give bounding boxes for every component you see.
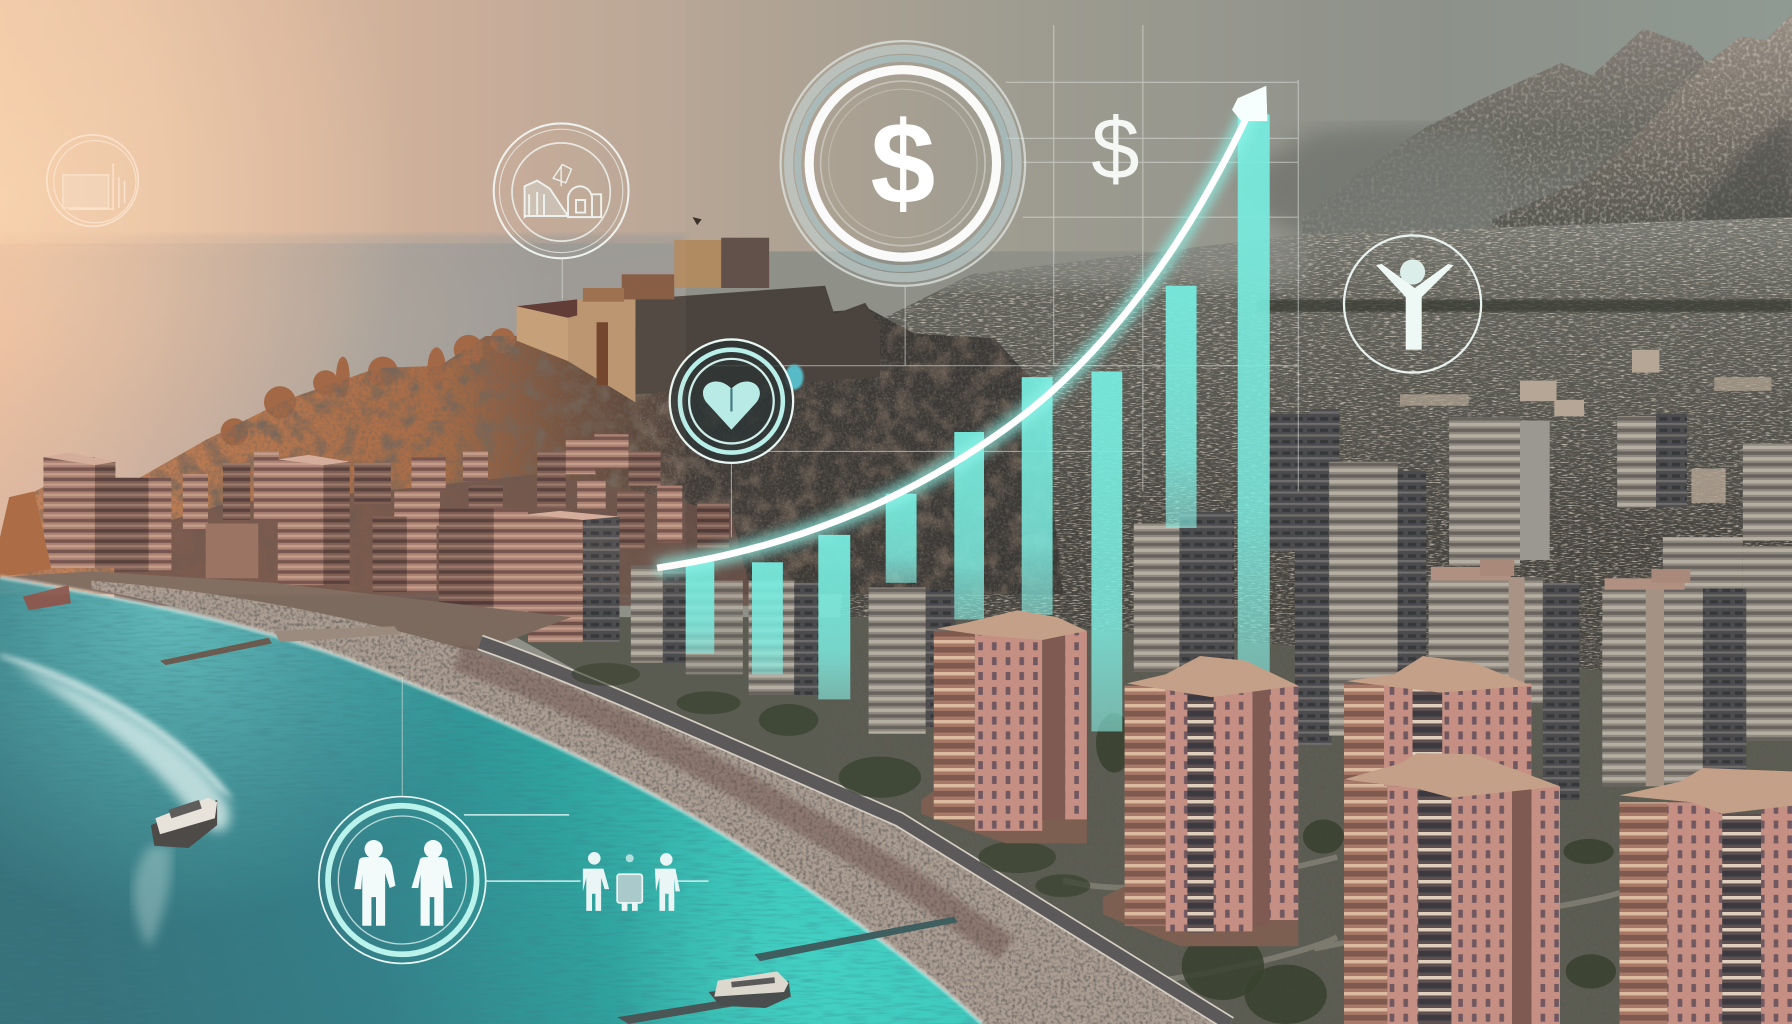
tower bbox=[1617, 414, 1687, 507]
icon: person with raised arms badge bbox=[1344, 235, 1481, 373]
lower land bbox=[480, 617, 1792, 1024]
tower A bbox=[921, 610, 1087, 843]
icon: heart and book badge bbox=[670, 339, 803, 463]
boat near wake bbox=[151, 798, 217, 848]
tower bbox=[1269, 409, 1339, 551]
bar 7 bbox=[1091, 371, 1122, 731]
tower bbox=[278, 455, 350, 585]
ragged tree line bbox=[221, 328, 515, 446]
tower bbox=[373, 517, 437, 592]
tower bbox=[631, 566, 686, 663]
tan tower bbox=[674, 240, 721, 288]
boat wake bbox=[0, 654, 234, 949]
tower C bbox=[1344, 656, 1531, 789]
low block bbox=[206, 523, 258, 578]
tower bbox=[1743, 443, 1792, 541]
tower bbox=[686, 581, 743, 674]
hillside town bbox=[114, 434, 754, 606]
tower D bbox=[1344, 753, 1560, 1024]
mid-ground blocks bbox=[1400, 350, 1771, 503]
person bbox=[583, 852, 609, 911]
tower bbox=[1134, 512, 1234, 678]
icon: heritage landmark badge bbox=[494, 123, 629, 258]
tower bbox=[528, 511, 619, 642]
inner wall bbox=[568, 299, 635, 402]
people group icons bbox=[583, 852, 680, 911]
bar 2 bbox=[752, 562, 783, 674]
tower E bbox=[1619, 768, 1792, 1024]
wooded hill with castle bbox=[0, 217, 1063, 600]
growth arrow bbox=[657, 86, 1267, 568]
warm haze overlay bbox=[0, 0, 686, 594]
left seafront towers bbox=[43, 453, 686, 663]
tower bbox=[1429, 560, 1579, 800]
background towers right bbox=[686, 409, 1792, 800]
person left bbox=[354, 840, 395, 926]
tower bbox=[1449, 417, 1550, 566]
tower bbox=[439, 509, 528, 611]
haze near mountains bbox=[1246, 131, 1543, 246]
coastal road bbox=[480, 642, 1230, 1024]
sun glow bbox=[0, 0, 686, 640]
person bbox=[655, 853, 680, 911]
icon: faint building badge bbox=[47, 135, 138, 226]
outer glass rings bbox=[781, 41, 1025, 286]
piers bbox=[23, 585, 958, 1024]
tower bbox=[43, 453, 115, 568]
people badge bbox=[319, 797, 486, 963]
bar 4 bbox=[886, 494, 917, 583]
shore foliage bbox=[0, 491, 571, 651]
lower boat bbox=[709, 971, 791, 1008]
tower bbox=[114, 478, 171, 571]
connector lines bbox=[464, 815, 709, 881]
bright ring bbox=[809, 70, 997, 257]
bar 9 bbox=[1238, 114, 1270, 677]
person right bbox=[411, 840, 453, 926]
background sky bbox=[0, 0, 1792, 251]
tower B bbox=[1103, 656, 1298, 946]
dark tower bbox=[721, 238, 769, 288]
mountains bbox=[1302, 11, 1792, 247]
front pink towers bbox=[921, 610, 1792, 1024]
bar 1 bbox=[686, 560, 714, 654]
figure with sign bbox=[617, 854, 642, 911]
dollar sign: $ bbox=[870, 97, 935, 228]
small battlement bbox=[622, 274, 674, 299]
sea water bay bbox=[0, 571, 994, 1024]
city plain bbox=[840, 217, 1792, 670]
tower bbox=[1295, 462, 1426, 745]
bar 5 bbox=[954, 432, 984, 619]
beach with umbrellas bbox=[0, 577, 1234, 1024]
tower bbox=[1663, 537, 1792, 741]
large dollar badge bbox=[781, 41, 1025, 286]
dark rampart bbox=[635, 286, 880, 394]
light outer wall bbox=[517, 306, 568, 361]
bar 3 bbox=[818, 535, 850, 699]
castle bbox=[517, 217, 880, 402]
palms and greenery bbox=[571, 663, 1616, 1024]
tower bbox=[1602, 569, 1746, 786]
bar 8 bbox=[1166, 286, 1197, 528]
bar 6 bbox=[1022, 377, 1053, 615]
rising bar chart bbox=[686, 114, 1270, 731]
tower bbox=[869, 587, 955, 734]
sea at horizon bbox=[0, 234, 686, 598]
small dollar sign: $ bbox=[1091, 100, 1140, 197]
chart grid lines bbox=[402, 25, 1298, 795]
tower bbox=[749, 581, 819, 695]
